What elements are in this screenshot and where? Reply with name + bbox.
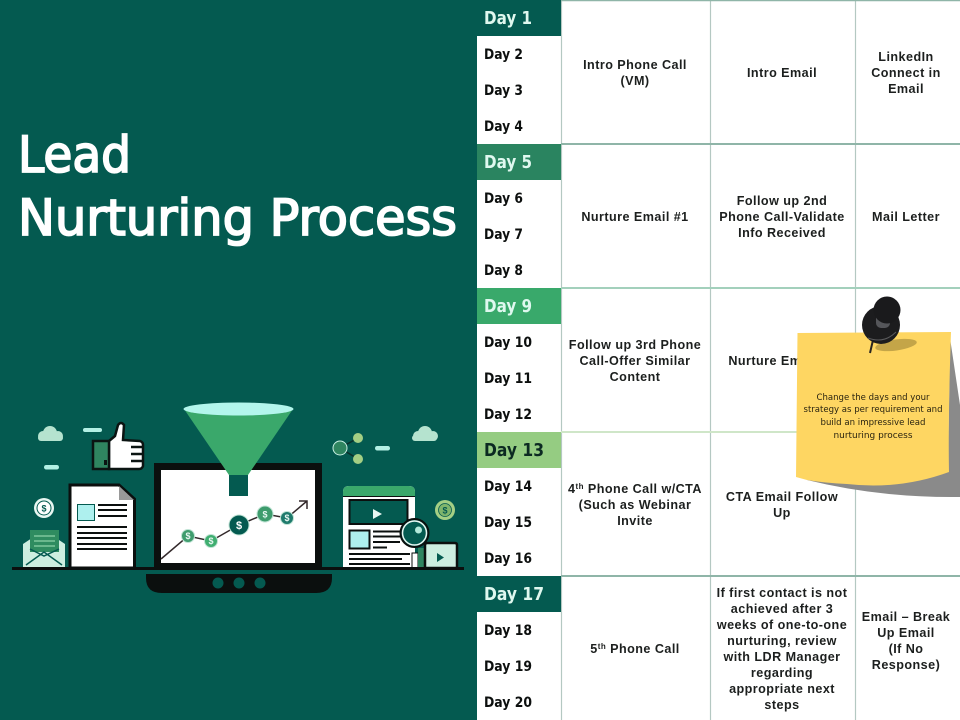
schedule table — [477, 0, 960, 720]
icon: dollar coin left — [34, 498, 54, 518]
activity cells: 4 — [568, 482, 576, 496]
day labels: Day 16 — [484, 551, 532, 567]
line chart with coins: $ — [262, 510, 268, 520]
icon: dashes — [44, 428, 390, 470]
day column header cells: Day 17 — [484, 585, 544, 605]
activity cells: regarding — [751, 666, 813, 680]
day labels: Day 2 — [484, 47, 523, 63]
activity cells: Response) — [872, 658, 940, 672]
note text: strategy as per requirement and — [804, 405, 942, 415]
activity cells: Content — [610, 370, 661, 384]
activity cells — [568, 50, 951, 712]
icon: cloud right — [412, 426, 438, 441]
activity cells: Nurture Email #2 — [728, 354, 836, 368]
day labels: Day 6 — [484, 191, 523, 207]
line chart with coins — [161, 501, 307, 559]
sticky note callout — [796, 296, 960, 497]
icon: dollar coin left: $ — [41, 504, 47, 514]
illustration: funnel and marketing icons — [12, 402, 464, 593]
activity cells: CTA Email Follow — [726, 490, 838, 504]
activity cells: Call-Offer Similar — [580, 354, 690, 368]
pin shadow — [874, 337, 918, 353]
activity cells: th — [576, 482, 584, 491]
icon: cloud left — [38, 426, 63, 441]
note text: nurturing process — [834, 431, 913, 441]
activity cells: with LDR Manager — [722, 650, 841, 664]
activity cells: 5 — [590, 642, 598, 656]
icon: dollar coin right: $ — [442, 506, 448, 516]
icon: laptop — [146, 466, 332, 593]
line chart with coins: $ — [236, 520, 242, 532]
note text — [804, 393, 942, 441]
day labels: Day 12 — [484, 407, 532, 423]
title — [18, 126, 457, 247]
day labels: Day 3 — [484, 83, 523, 99]
activity cells: Intro Phone Call — [583, 58, 687, 72]
activity cells: steps — [764, 698, 800, 712]
day column header cells: Day 5 — [484, 153, 532, 173]
icon: browser window — [343, 486, 415, 568]
icon: envelope — [23, 530, 65, 567]
activity cells: Mail Letter — [872, 210, 940, 224]
activity cells: Email — [888, 82, 924, 96]
day column header cells — [477, 0, 561, 612]
note shadow — [807, 338, 960, 497]
note paper — [796, 332, 951, 486]
icon: push pin — [862, 296, 900, 353]
day labels: Day 11 — [484, 371, 532, 387]
left background panel — [0, 0, 477, 720]
note text: build an impressive lead — [820, 418, 926, 428]
activity cells: th — [598, 642, 606, 651]
activity cells: Follow up 3rd Phone — [569, 338, 701, 352]
icon: thumbs up — [93, 423, 143, 469]
table grid lines — [561, 0, 960, 720]
activity cells: (If No — [889, 642, 923, 656]
day labels: Day 20 — [484, 695, 532, 711]
activity cells: Nurture Email #1 — [581, 210, 689, 224]
activity cells: Phone Call — [606, 642, 680, 656]
day column header cells: Day 9 — [484, 297, 532, 317]
icon: dollar coin right — [435, 500, 455, 520]
icon: share nodes — [333, 433, 363, 464]
line chart with coins: $ — [185, 531, 191, 541]
activity cells: LinkedIn — [878, 50, 934, 64]
day labels: Day 18 — [484, 623, 532, 639]
day labels: Day 10 — [484, 335, 532, 351]
line chart with coins: $ — [284, 513, 290, 523]
icon: document — [70, 485, 134, 568]
day labels: Day 15 — [484, 515, 532, 531]
activity cells: Connect in — [871, 66, 941, 80]
activity cells: (Such as Webinar — [579, 498, 691, 512]
line chart with coins: $ — [208, 536, 214, 546]
day labels: Day 19 — [484, 659, 532, 675]
activity cells: If first contact is not — [717, 586, 848, 600]
title: Lead — [18, 126, 131, 184]
activity cells: Phone Call w/CTA — [584, 482, 702, 496]
day labels: Day 4 — [484, 119, 523, 135]
ground line — [12, 567, 464, 570]
day column header cells: Day 13 — [484, 441, 544, 461]
icon: small video tablet — [425, 543, 457, 568]
activity cells: Info Received — [738, 226, 826, 240]
activity cells: achieved after 3 — [731, 602, 833, 616]
activity cells: Invite — [617, 514, 653, 528]
day labels: Day 14 — [484, 479, 532, 495]
title: Nurturing Process — [18, 189, 457, 247]
activity cells: nurturing, review — [727, 634, 837, 648]
note text: Change the days and your — [816, 393, 930, 403]
day labels: Day 8 — [484, 263, 523, 279]
activity cells: weeks of one-to-one — [716, 618, 847, 632]
day labels — [484, 47, 532, 711]
day column header cells: Day 1 — [484, 9, 532, 29]
activity cells: Phone Call-Validate — [719, 210, 845, 224]
activity cells: appropriate next — [729, 682, 835, 696]
activity cells: Follow up 2nd — [737, 194, 827, 208]
day labels: Day 7 — [484, 227, 523, 243]
activity cells: (VM) — [620, 74, 650, 88]
icon: magnifier — [400, 519, 428, 568]
activity cells: Email – Break — [862, 610, 951, 624]
activity cells: Up Email — [877, 626, 935, 640]
icon: funnel — [184, 402, 294, 496]
activity cells: Intro Email — [747, 66, 817, 80]
activity cells: Up — [773, 506, 791, 520]
